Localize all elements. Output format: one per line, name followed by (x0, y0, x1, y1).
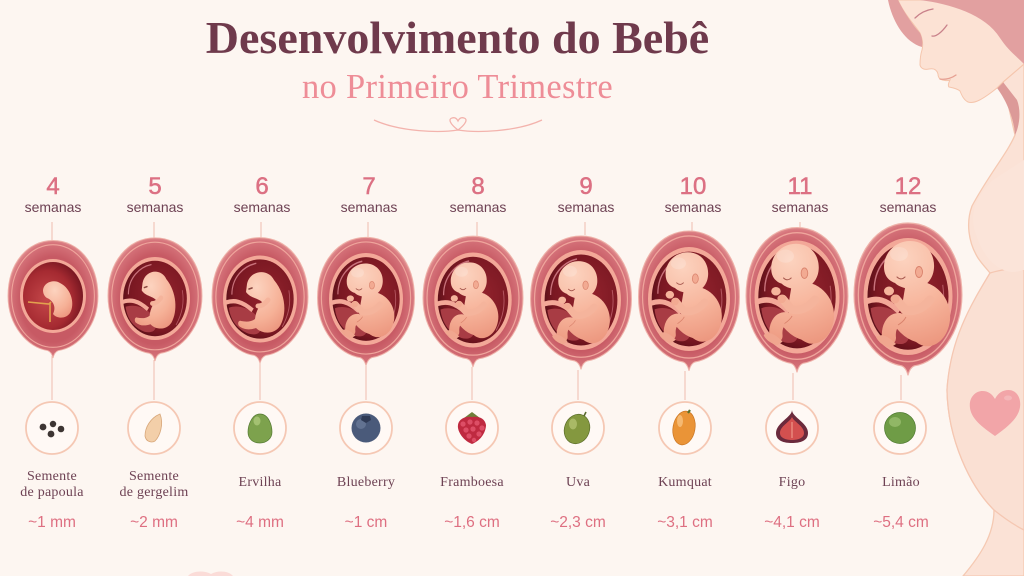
food label: de gergelim (120, 485, 188, 500)
icon: raspberry (446, 402, 498, 454)
week label: 6 (255, 173, 269, 200)
icon: lime (874, 402, 926, 454)
week label: semanas (450, 199, 506, 215)
food label: de papoula (20, 485, 84, 500)
face (898, 0, 1024, 102)
icon: grape (552, 402, 604, 454)
week label: 4 (46, 173, 60, 200)
icon: fig (766, 402, 818, 454)
size: ~1,6 cm (444, 514, 500, 531)
womb (108, 238, 202, 361)
week label: 11 (788, 173, 812, 200)
belly (947, 269, 1024, 530)
icon: poppy seeds (26, 402, 78, 454)
stage: 9 semanas (530, 173, 632, 531)
week label: 12 (895, 173, 921, 200)
size: ~1 cm (345, 514, 387, 531)
size: ~2 mm (130, 514, 178, 531)
week label (450, 173, 506, 215)
food label: Figo (779, 475, 805, 490)
size: ~2,3 cm (550, 514, 606, 531)
week label (25, 173, 81, 215)
week label: semanas (665, 199, 721, 215)
week label: 7 (362, 173, 376, 200)
food label: Limão (882, 475, 920, 490)
week label: semanas (772, 199, 828, 215)
hair behind neck (997, 82, 1019, 135)
food label: Uva (566, 475, 591, 490)
stage: 11 semanas (746, 173, 848, 531)
week label: 8 (471, 173, 485, 200)
hair (888, 0, 1024, 64)
week label (772, 173, 828, 215)
eyelid and brow (915, 9, 956, 79)
stage: 6 semanas (212, 173, 308, 531)
week label (665, 173, 721, 215)
size: ~5,4 cm (873, 514, 929, 531)
title: Desenvolvimento do Bebê (206, 12, 709, 63)
week label: semanas (880, 199, 936, 215)
icon: kumquat (659, 402, 711, 454)
food label (20, 469, 84, 500)
size: ~1 mm (28, 514, 76, 531)
week label (234, 173, 290, 215)
stage: 5 semanas (108, 173, 202, 531)
illustration: pregnant woman (888, 0, 1024, 576)
breast (973, 160, 1024, 272)
week label: semanas (558, 199, 614, 215)
food label: Ervilha (239, 475, 282, 490)
stage: 8 semanas (423, 173, 523, 531)
week label: 10 (680, 173, 706, 200)
size: ~4,1 cm (764, 514, 820, 531)
week label (341, 173, 397, 215)
week label (127, 173, 183, 215)
food label: Semente (129, 469, 179, 484)
week label: semanas (127, 199, 183, 215)
size: ~3,1 cm (657, 514, 713, 531)
week label: 9 (579, 173, 593, 200)
food label: Kumquat (658, 475, 712, 490)
week label: 5 (148, 173, 162, 200)
week label: semanas (341, 199, 397, 215)
stage: 7 semanas (318, 173, 414, 531)
food label: Framboesa (440, 475, 504, 490)
womb (746, 228, 848, 372)
ornament: heart divider (374, 118, 542, 131)
icon: sesame seed (128, 402, 180, 454)
week label: semanas (25, 199, 81, 215)
womb (212, 238, 308, 363)
stage: 4 semanas (8, 173, 98, 531)
icon: pea (234, 402, 286, 454)
week label (558, 173, 614, 215)
size: ~4 mm (236, 514, 284, 531)
icon: heart on belly (970, 390, 1020, 436)
womb (318, 237, 414, 366)
womb (8, 240, 98, 358)
stage: 10 semanas (638, 173, 740, 531)
food label: Semente (27, 469, 77, 484)
week label (880, 173, 936, 215)
food label (120, 469, 188, 500)
womb (638, 231, 740, 371)
womb (530, 236, 632, 369)
decorative heart at bottom (188, 572, 233, 576)
subtitle: no Primeiro Trimestre (302, 68, 613, 106)
icon: blueberry (340, 402, 392, 454)
womb (423, 236, 523, 367)
womb (854, 223, 962, 375)
stage: 12 semanas (854, 173, 962, 531)
torso (947, 64, 1024, 576)
week label: semanas (234, 199, 290, 215)
food label: Blueberry (337, 475, 395, 490)
